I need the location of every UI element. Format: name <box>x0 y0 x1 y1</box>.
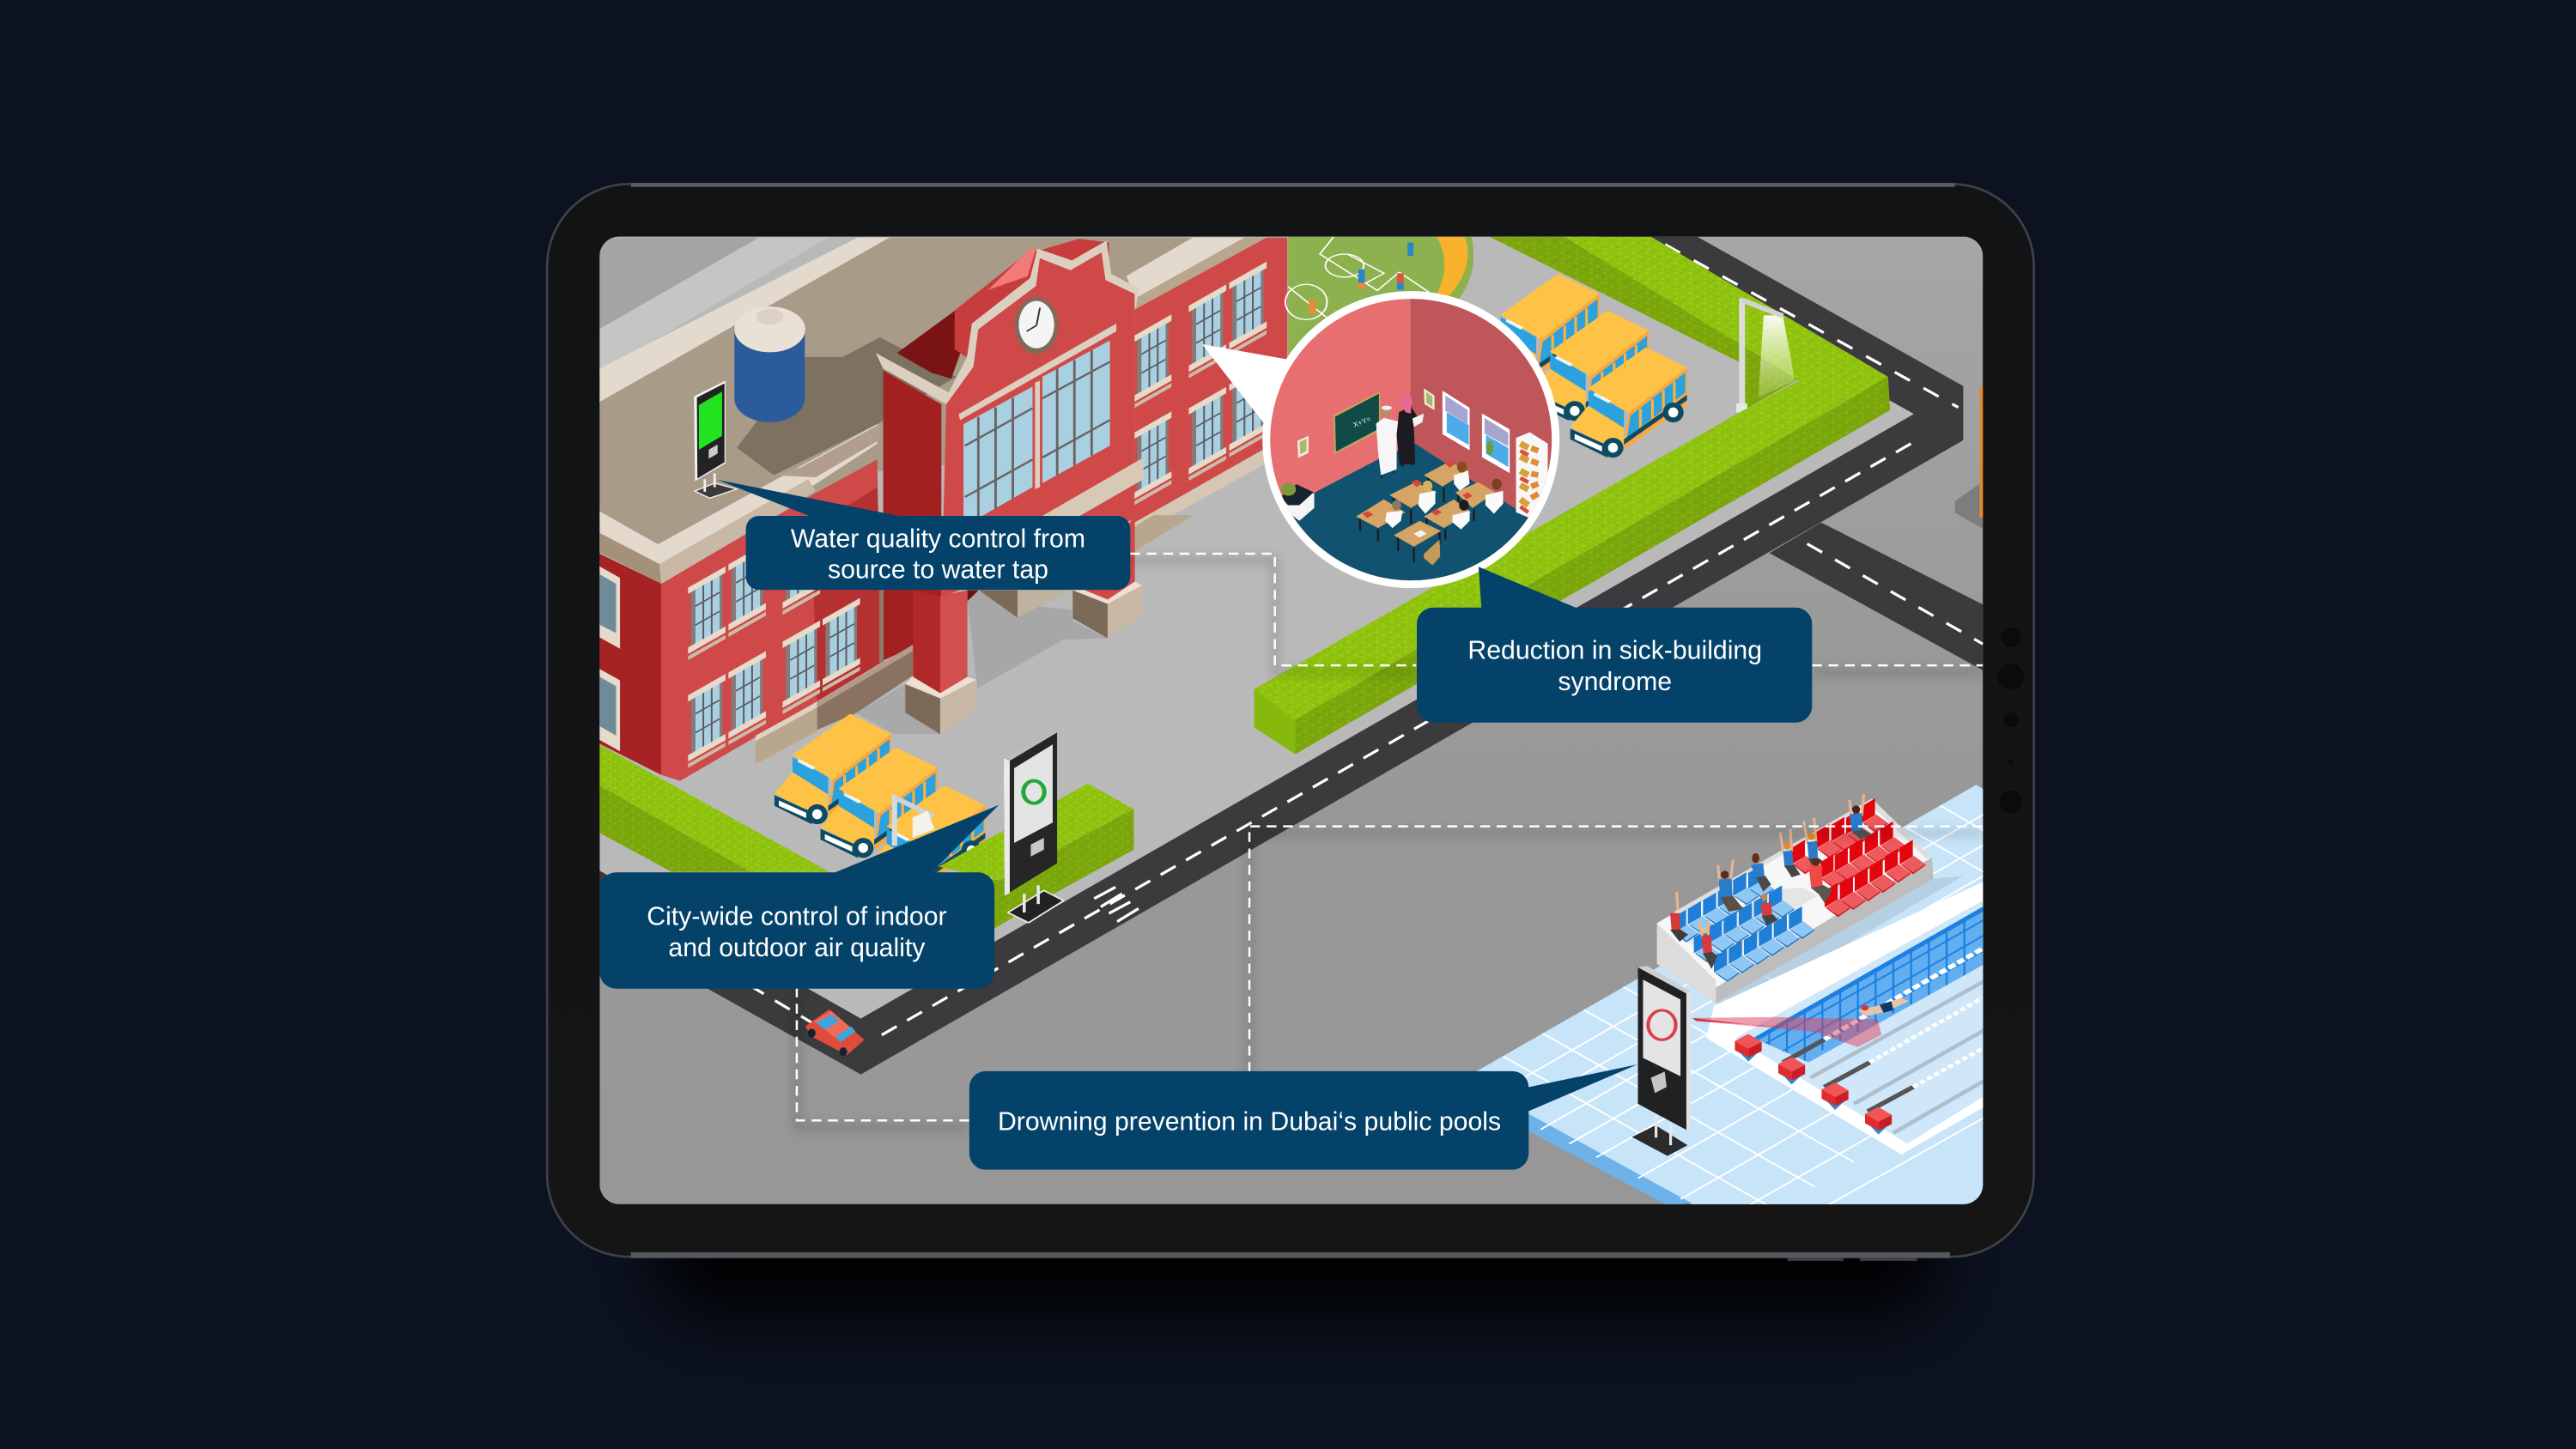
school building <box>598 238 1287 781</box>
left wing side wall <box>598 554 661 775</box>
sports field <box>1285 237 1473 355</box>
central gable front wall <box>941 252 1134 597</box>
right school buses <box>1483 274 1687 458</box>
tiled pool deck <box>1452 785 1984 1213</box>
kiosk sensor beam <box>1692 1017 1881 1047</box>
icon: rooftop kiosk with green screen <box>694 380 737 498</box>
surrounding roof level grey <box>598 238 759 330</box>
tablet device <box>547 184 2034 1259</box>
callout: sick-building syndrome <box>1417 567 1812 723</box>
wing plinth <box>756 515 1194 764</box>
students <box>1385 462 1504 530</box>
portico band <box>1042 458 1144 516</box>
front pillar base <box>905 676 976 734</box>
left hedge, buses, small hedge and kiosk <box>599 744 829 872</box>
classroom zoom bubble <box>1202 291 1559 592</box>
street lamp <box>1736 297 1795 412</box>
callout: water quality <box>717 480 1130 590</box>
swimmer <box>1858 998 1909 1016</box>
left wing front wall <box>661 459 881 781</box>
icon: clock <box>1015 297 1058 354</box>
callout: water quality: Water quality control from <box>791 524 1085 553</box>
icon: front camera sensors <box>1998 627 2024 813</box>
windows <box>598 521 860 767</box>
rear portico base <box>979 591 1071 618</box>
central gable trim <box>876 240 1139 404</box>
callout: water quality: source to water tap <box>828 556 1048 585</box>
blackboard: X+Y= <box>1352 415 1372 429</box>
small lamp post <box>892 795 934 846</box>
ground shadows <box>856 591 1108 734</box>
student desks <box>1356 461 1497 565</box>
bookshelf <box>1516 432 1548 518</box>
tablet shadow <box>657 1134 1939 1314</box>
callout: sick-building syndrome: syndrome <box>1558 668 1672 696</box>
left school buses <box>775 714 985 895</box>
callout: air quality: and outdoor air quality <box>668 934 926 962</box>
right wing <box>1127 238 1244 298</box>
players <box>1309 243 1413 313</box>
kiosk with red ring <box>1632 966 1691 1156</box>
starting blocks <box>1735 1034 1892 1135</box>
dashed connector lines <box>797 554 1983 1120</box>
cabinet with plant <box>1281 483 1315 521</box>
right wing windows <box>1134 262 1267 506</box>
callout: drowning prevention: Drowning prevention in Dubai‘s public pools <box>998 1108 1501 1137</box>
front pillar <box>913 591 968 694</box>
left hedge <box>599 744 829 872</box>
green hedges along campus perimeter <box>1255 237 1890 755</box>
front parapet <box>598 424 878 584</box>
screen: isometric city scene <box>598 237 1984 1213</box>
callout: drowning prevention <box>969 1064 1637 1170</box>
blackboard <box>1334 391 1381 454</box>
roof shadow <box>737 337 957 476</box>
callout: sick-building syndrome: Reduction in sick-building <box>1467 636 1762 664</box>
small hedge <box>939 784 1133 928</box>
classroom windows <box>1443 391 1510 473</box>
campus sidewalk <box>599 237 1914 1019</box>
callout: air quality: City-wide control of indoor <box>647 902 947 931</box>
spectator stand <box>1657 794 1964 1003</box>
road network <box>599 237 1983 1075</box>
kiosk with green ring <box>1004 732 1064 923</box>
icon: red car <box>805 1009 865 1056</box>
blue seats <box>1673 865 1814 982</box>
wall pictures <box>1297 388 1435 458</box>
red seats <box>1792 798 1926 917</box>
gable dark side <box>884 371 941 661</box>
callout: air quality <box>599 805 999 989</box>
right pillar and base <box>1072 515 1142 639</box>
icon: water tank <box>734 306 805 422</box>
roof surface <box>598 238 1193 562</box>
pool with lanes <box>1706 882 1984 1155</box>
bubble pointer <box>1202 344 1290 425</box>
teachers <box>1376 394 1424 478</box>
swimming pool complex <box>1452 785 1984 1213</box>
spectators <box>1670 794 1872 969</box>
classroom interior <box>1268 292 1559 592</box>
large facade windows <box>958 324 1116 526</box>
ground <box>599 237 1983 1204</box>
far right building sliver <box>1955 386 1983 529</box>
portico, pillars and plinth <box>756 515 1194 764</box>
lane ropes <box>1783 949 1982 1112</box>
